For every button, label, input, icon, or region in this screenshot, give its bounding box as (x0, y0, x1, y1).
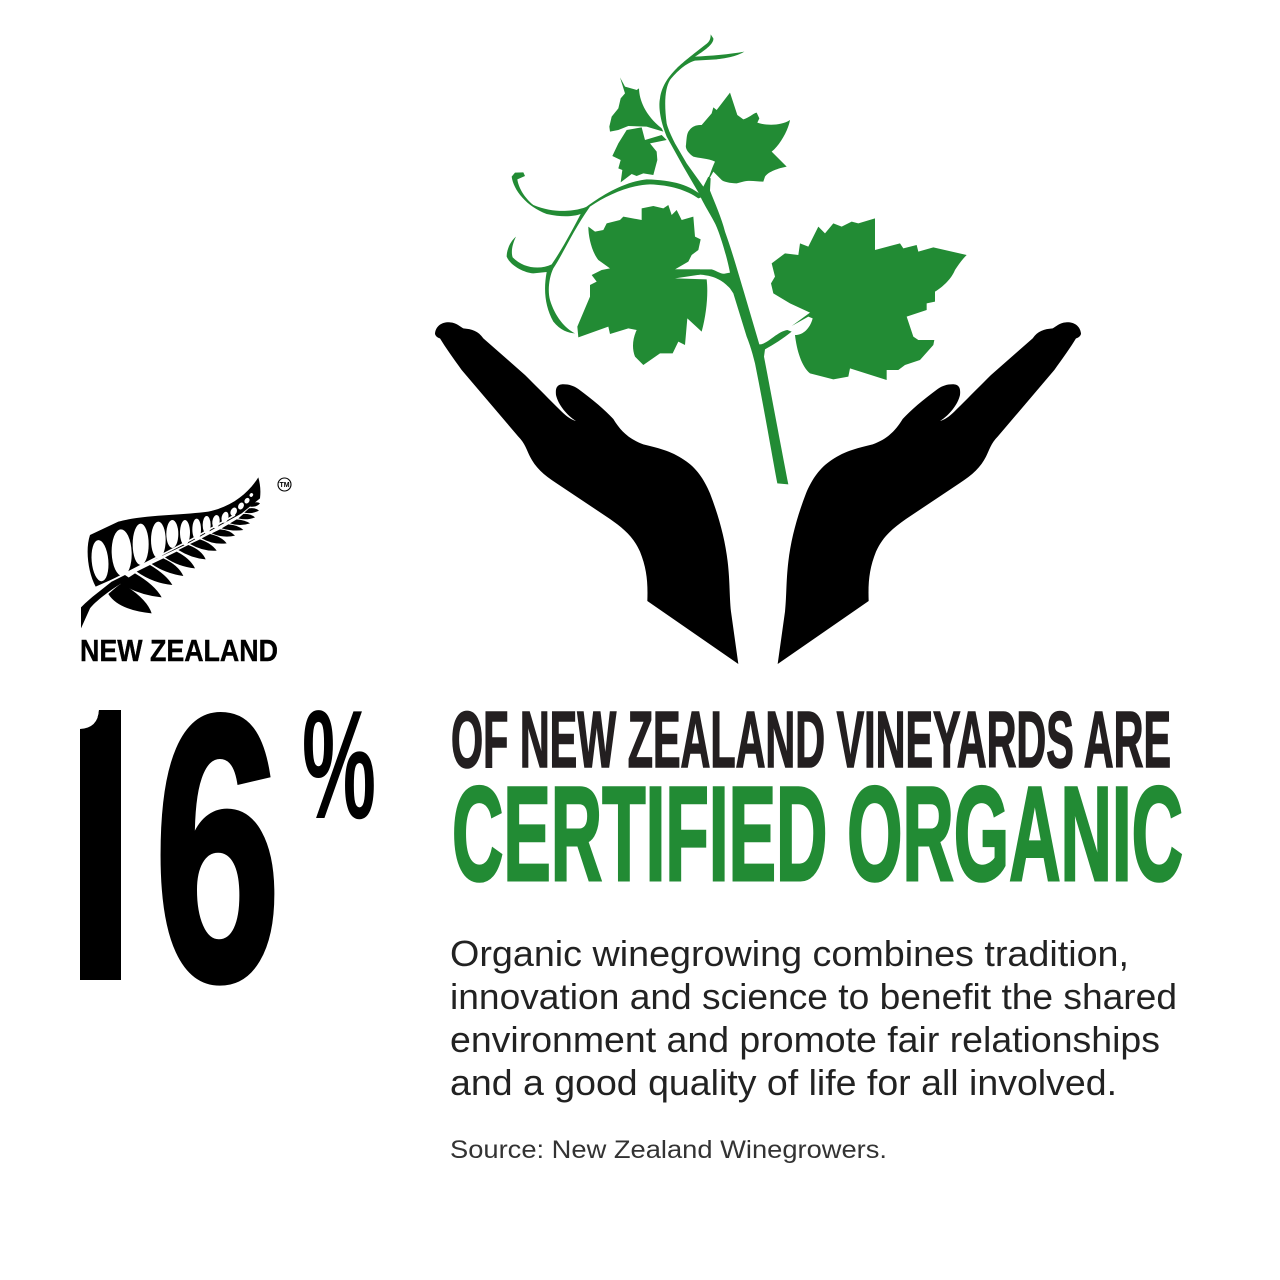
tendrils (507, 172, 703, 333)
heading (451, 695, 1183, 909)
small leaf top (609, 77, 663, 132)
body text: and a good quality of life for all involved. (450, 1062, 1117, 1103)
infographic canvas (80, 34, 1182, 1163)
source note: Source: New Zealand Winegrowers. (450, 1136, 887, 1164)
right hand (778, 322, 1081, 664)
body text (450, 933, 1177, 1103)
leaf upper right (686, 93, 790, 187)
small leaf lower (612, 127, 667, 182)
big leaf left (577, 205, 707, 365)
left hand (435, 322, 738, 664)
logo: New Zealand silver fern (80, 477, 291, 668)
trademark symbol (278, 478, 291, 491)
vine stem (659, 34, 792, 484)
body text: innovation and science to benefit the shared (450, 976, 1177, 1017)
body text: Organic winegrowing combines tradition, (450, 933, 1129, 974)
percent sign: % (302, 678, 376, 852)
icon: grapevine plant (507, 34, 967, 484)
body text: environment and promote fair relationships (450, 1019, 1160, 1060)
icon: cupped hands (435, 322, 1081, 664)
big statistic: 16% (80, 710, 374, 986)
logo wordmark: NEW ZEALAND (80, 633, 278, 668)
trademark symbol: TM (279, 482, 290, 489)
icon: fern (81, 477, 260, 628)
digit 6: 6 (154, 637, 281, 1060)
big leaf right (771, 218, 967, 380)
